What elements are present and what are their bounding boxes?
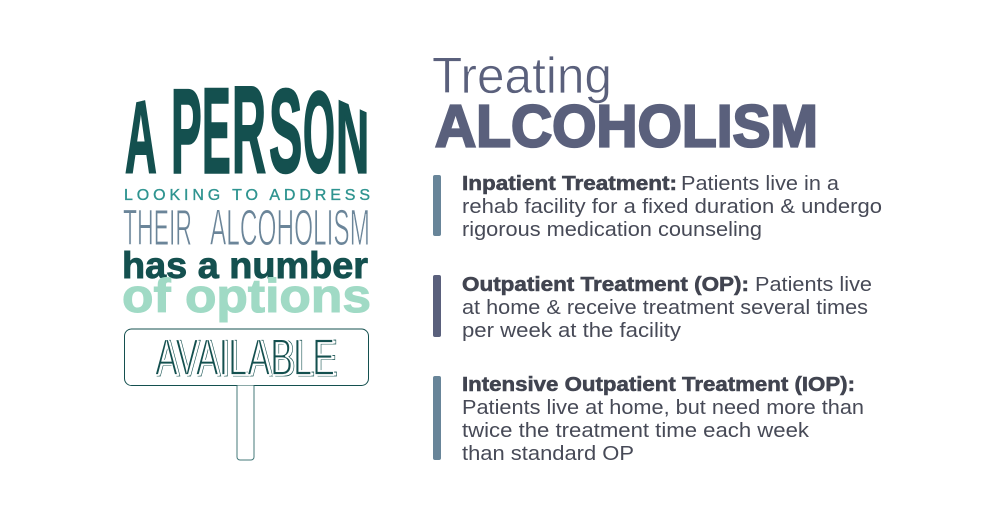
title line: ALCOHOLISM: ALCOHOLISM xyxy=(435,94,818,160)
panel: inpatient treatment xyxy=(433,173,882,241)
text block: Outpatient Treatment (OP): xyxy=(462,274,749,296)
accent bar xyxy=(433,376,441,460)
text: AVAILABLE: AVAILABLE xyxy=(155,327,335,387)
heading: A PERSON: R xyxy=(232,62,266,199)
panel: outpatient treatment xyxy=(433,274,872,342)
text block: at home & receive treatment several times xyxy=(462,297,868,319)
heading: A PERSON: A xyxy=(125,78,157,196)
text block: twice the treatment time each week xyxy=(462,420,810,442)
panel: sign illustration xyxy=(122,62,371,460)
panel: intensive outpatient treatment xyxy=(433,374,864,465)
text: has a number: has a number xyxy=(122,245,368,286)
accent bar xyxy=(433,275,441,337)
text block: rehab facility for a fixed duration & undergo xyxy=(462,196,882,218)
text: THEIR ALCOHOLISM: THEIR xyxy=(123,201,192,257)
sign post xyxy=(237,386,254,460)
text block: Intensive Outpatient Treatment (IOP): xyxy=(462,374,855,396)
text block xyxy=(462,374,864,465)
text block: Patients live in a xyxy=(681,173,840,195)
sign board xyxy=(124,329,368,386)
text: LOOKING TO ADDRESS: LOOKING TO ADDRESS xyxy=(124,187,370,204)
text block: Patients live at home, but need more than xyxy=(462,397,864,419)
heading: A PERSON: O xyxy=(303,69,335,197)
text block: per week at the facility xyxy=(462,320,681,342)
accent bar xyxy=(433,175,441,236)
text block: than standard OP xyxy=(462,443,634,465)
text: AVAILABLE: AVAILABLE xyxy=(157,328,338,388)
text block: Patients live xyxy=(755,274,872,296)
text: THEIR ALCOHOLISM xyxy=(123,201,370,257)
heading: A PERSON xyxy=(126,86,367,174)
title line: Treating: Treating xyxy=(432,47,612,104)
text: of options: of options xyxy=(122,269,371,322)
text block xyxy=(462,173,882,241)
text: THEIR ALCOHOLISM: ALCOHOLISM xyxy=(210,201,370,257)
title xyxy=(432,47,818,160)
text block: rigorous medication counseling xyxy=(462,219,762,241)
heading: A PERSON: P xyxy=(171,66,202,199)
heading: A PERSON: E xyxy=(202,63,231,199)
heading: A PERSON: S xyxy=(269,65,302,198)
text block: Inpatient Treatment: xyxy=(462,173,677,195)
heading: A PERSON: N xyxy=(336,75,369,196)
text block xyxy=(462,274,872,342)
